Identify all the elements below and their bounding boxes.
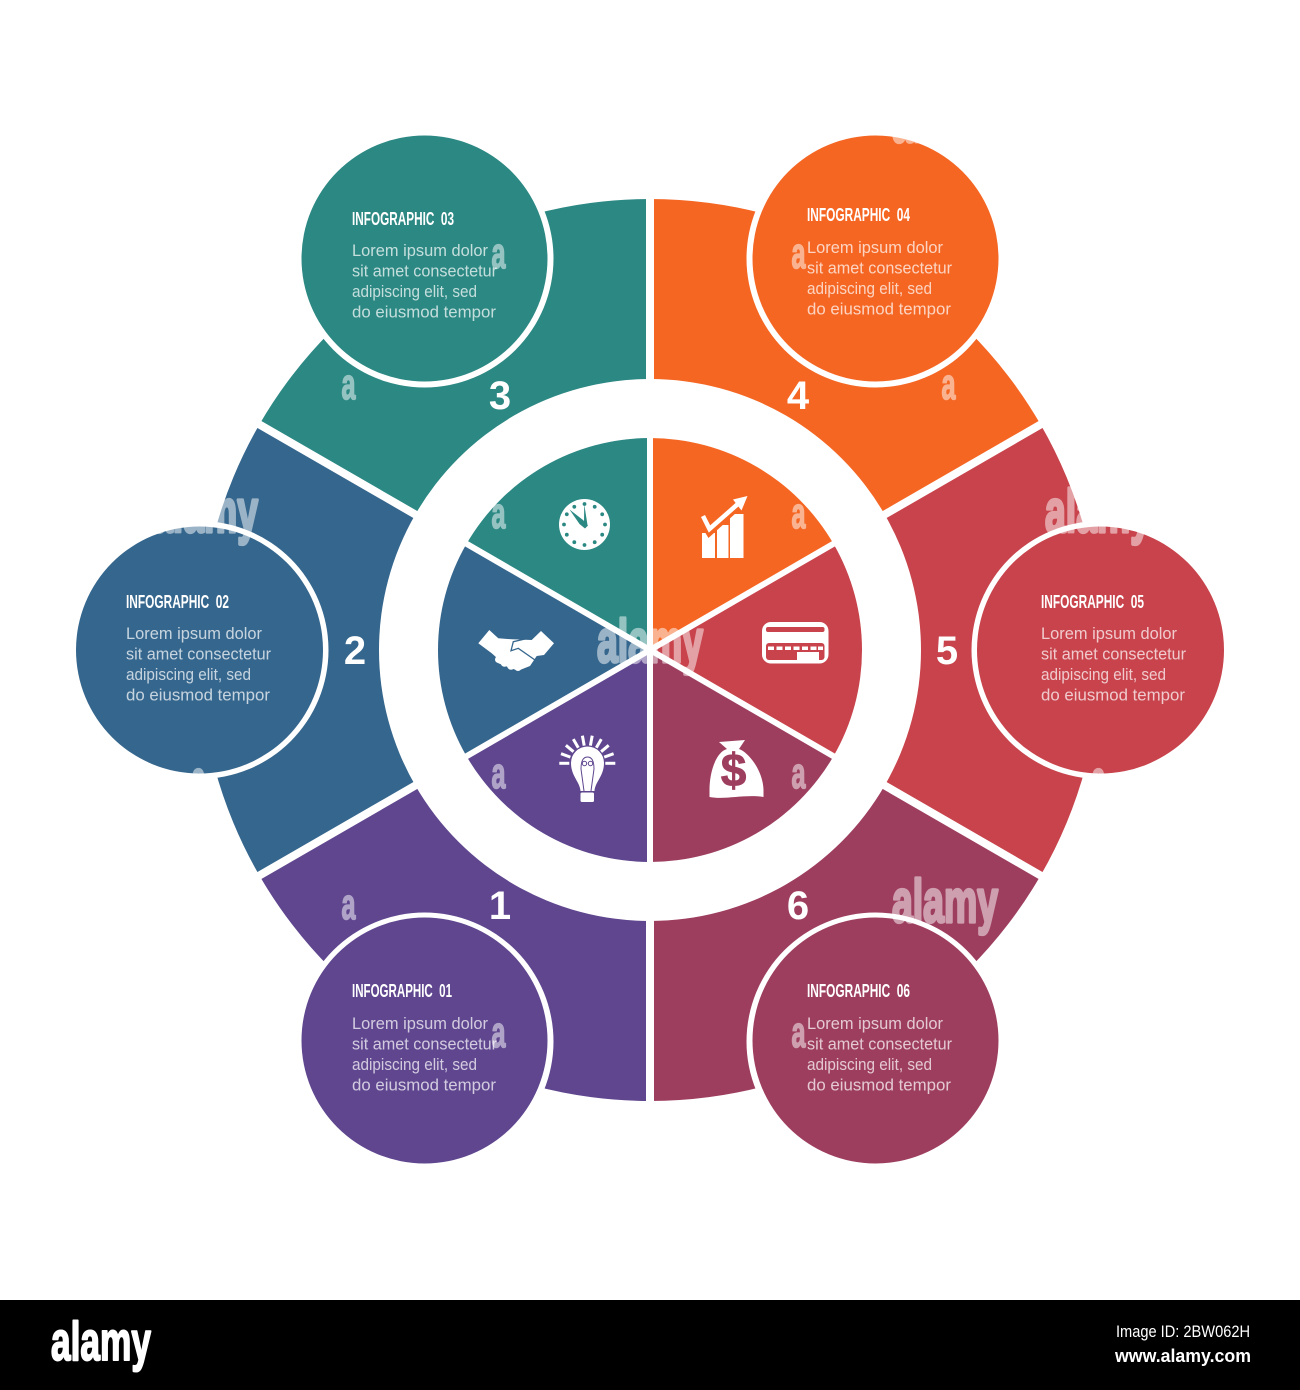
text 02: do eiusmod tempor	[126, 686, 271, 704]
title 05: INFOGRAPHIC 05	[1041, 592, 1144, 612]
number 2: 2	[344, 629, 366, 673]
inner pie	[438, 438, 862, 862]
image id: Image ID: 2BW062H	[1116, 1323, 1250, 1341]
watermarks: a	[792, 749, 806, 798]
text 05: do eiusmod tempor	[1041, 686, 1186, 704]
watermarks: a	[1092, 753, 1106, 802]
number 6: 6	[787, 884, 809, 928]
text 03: Lorem ipsum dolor	[352, 242, 489, 260]
pie slice 2	[438, 544, 650, 756]
watermarks: a	[192, 753, 206, 802]
watermarks: alamy	[892, 868, 998, 935]
pie slice 4	[650, 438, 834, 650]
number 3: 3	[489, 374, 511, 418]
title 04: INFOGRAPHIC 04	[807, 205, 910, 225]
text 04	[807, 239, 952, 318]
number 4: 4	[787, 374, 810, 418]
text 03: adipiscing elit, sed	[352, 283, 477, 301]
circle 3	[296, 130, 554, 388]
watermarks: a	[342, 880, 356, 929]
text 06: adipiscing elit, sed	[807, 1056, 932, 1074]
watermarks: alamy	[1045, 478, 1151, 545]
watermarks: a	[792, 229, 806, 278]
icon: money bag	[710, 740, 764, 798]
website: www.alamy.com	[1114, 1346, 1251, 1366]
segment 4	[650, 199, 1041, 514]
text 01: adipiscing elit, sed	[352, 1056, 477, 1074]
text 03	[352, 242, 497, 322]
watermarks	[152, 88, 1151, 1057]
watermarks: a	[492, 749, 506, 798]
watermarks: a	[942, 360, 956, 409]
text 05: sit amet consectetur	[1041, 646, 1186, 664]
segment 6	[650, 786, 1041, 1101]
pie slice 3	[466, 438, 650, 650]
text 02	[126, 625, 271, 704]
circle 4	[746, 130, 1004, 388]
text 02: adipiscing elit, sed	[126, 666, 251, 684]
outer ring segments	[199, 199, 1101, 1101]
text 01: Lorem ipsum dolor	[352, 1015, 489, 1033]
icon: light bulb	[559, 736, 615, 802]
title 01: INFOGRAPHIC 01	[352, 981, 452, 1001]
number 1: 1	[489, 884, 511, 928]
circle 1	[296, 912, 554, 1170]
segment 3	[259, 199, 650, 514]
title 03: INFOGRAPHIC 03	[352, 209, 454, 229]
watermarks: a	[492, 1008, 506, 1057]
icon: credit card	[762, 622, 828, 664]
text 03: sit amet consectetur	[352, 262, 497, 280]
title 06: INFOGRAPHIC 06	[807, 981, 910, 1001]
footer logo: alamy	[51, 1310, 151, 1372]
text 04: do eiusmod tempor	[807, 300, 952, 318]
text 02: sit amet consectetur	[126, 646, 271, 664]
text 05: adipiscing elit, sed	[1041, 666, 1166, 684]
segment 1	[259, 786, 650, 1101]
segment 2	[199, 424, 415, 876]
watermarks: a	[492, 229, 506, 278]
text 02: Lorem ipsum dolor	[126, 625, 263, 643]
icon: growth chart	[702, 496, 748, 558]
text 06: Lorem ipsum dolor	[807, 1015, 944, 1033]
text 01: sit amet consectetur	[352, 1036, 497, 1054]
watermarks: a	[342, 360, 356, 409]
watermarks: a	[492, 489, 506, 538]
text 04: sit amet consectetur	[807, 260, 952, 278]
watermarks: a	[792, 489, 806, 538]
text 06: do eiusmod tempor	[807, 1076, 952, 1094]
watermarks: alamy	[597, 608, 703, 675]
icon: money bag: $	[721, 744, 746, 796]
title 02: INFOGRAPHIC 02	[126, 592, 229, 612]
footer bar	[0, 1300, 1300, 1390]
text 05: Lorem ipsum dolor	[1041, 625, 1178, 643]
icon: clock	[559, 499, 610, 550]
circle 5	[972, 521, 1230, 779]
pie slice 6	[650, 650, 834, 862]
pie slice 1	[466, 650, 650, 862]
watermarks: alamy	[152, 478, 258, 545]
text 05	[1041, 625, 1186, 704]
text 01	[352, 1015, 497, 1094]
text 04: Lorem ipsum dolor	[807, 239, 944, 257]
text 03: do eiusmod tempor	[352, 304, 497, 322]
number 5: 5	[936, 629, 958, 673]
text 06	[807, 1015, 952, 1094]
watermarks: a	[792, 1008, 806, 1057]
icon: handshake	[478, 630, 554, 671]
watermarks: alamy	[892, 88, 998, 155]
text 04: adipiscing elit, sed	[807, 280, 932, 298]
text 06: sit amet consectetur	[807, 1036, 952, 1054]
segment 5	[885, 424, 1101, 876]
circle 2	[70, 521, 328, 779]
circle 6	[746, 912, 1004, 1170]
text 01: do eiusmod tempor	[352, 1076, 497, 1094]
pie slice 5	[650, 544, 862, 756]
